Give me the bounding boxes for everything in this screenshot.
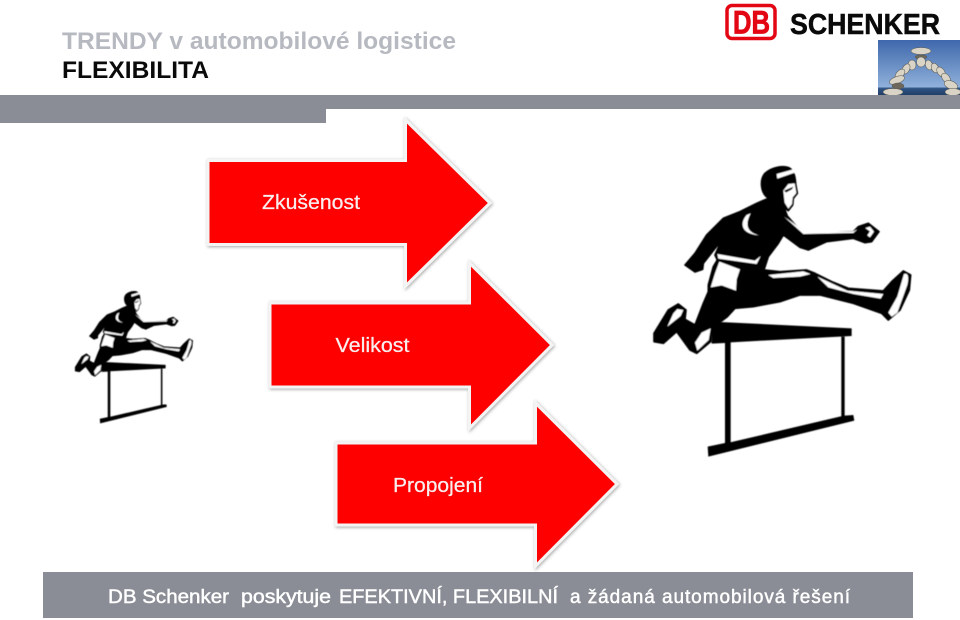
conclusion bar: poskytuje [241, 587, 331, 608]
arrow: Zkušenost [208, 120, 490, 286]
title: TRENDY v automobilové logistice [62, 28, 456, 55]
icon: large hurdler [654, 167, 911, 457]
title [62, 28, 456, 84]
arrow: Velikost: Velikost [336, 335, 410, 357]
conclusion bar [43, 572, 913, 618]
arrow: Propojení: Propojení [393, 475, 483, 497]
conclusion bar: EFEKTIVNÍ, FLEXIBILNÍ [339, 587, 559, 608]
logo: DB Schenker: SCHENKER [790, 9, 940, 41]
title: FLEXIBILITA [62, 57, 209, 84]
arrow: Propojení [336, 403, 617, 566]
conclusion bar: DB Schenker [108, 587, 230, 608]
icon: small hurdler [75, 291, 193, 423]
conclusion bar: a žádaná automobilová řešení [570, 587, 851, 608]
logo: DB Schenker [727, 4, 940, 41]
arrow: Velikost [270, 263, 552, 428]
photo: stone arch over the sea [878, 40, 960, 96]
header band [0, 95, 960, 123]
logo: DB Schenker: DB [733, 4, 770, 40]
arrow: Zkušenost: Zkušenost [262, 192, 360, 214]
